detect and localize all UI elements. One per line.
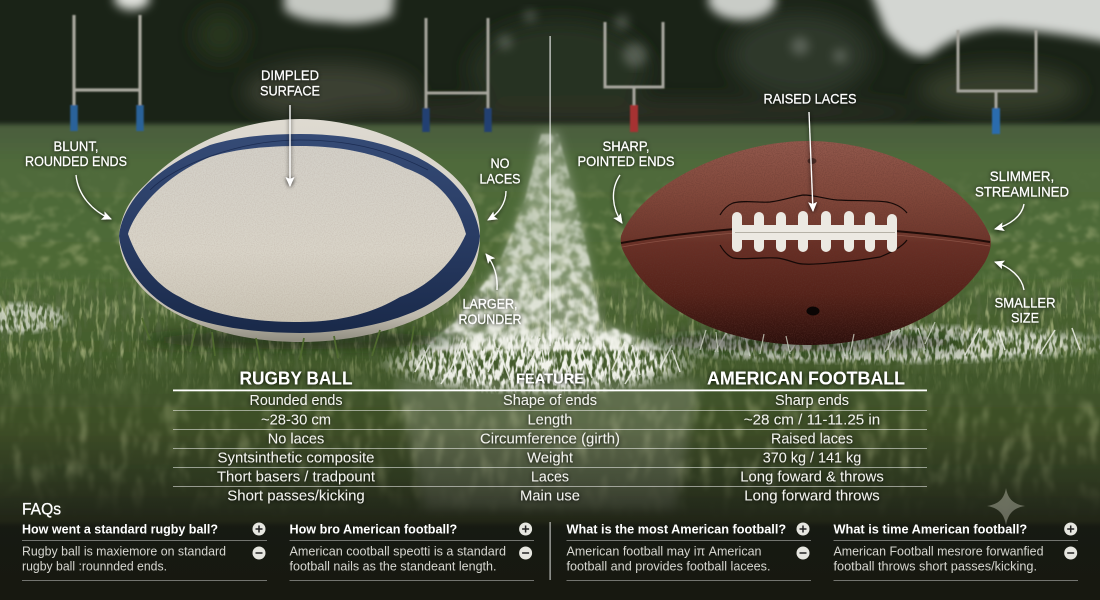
FAQ item 3 xyxy=(566,522,811,581)
feature column xyxy=(480,393,620,504)
centre divider xyxy=(550,36,551,346)
annotation: slimmer streamlined: SLIMMER, xyxy=(990,168,1054,184)
icon: plus xyxy=(796,522,810,536)
FAQ item 2: football nails as the standeant length. xyxy=(290,558,496,574)
ball body xyxy=(119,119,480,342)
icon: minus xyxy=(519,546,532,560)
football column: Long foward & throws xyxy=(740,470,884,486)
rugby column: Syntsinthetic composite xyxy=(218,450,374,466)
rugby column: Short passes/kicking xyxy=(227,488,365,504)
annotation: no laces: NO xyxy=(490,155,510,171)
annotation: smaller size xyxy=(994,262,1056,326)
football column: Sharp ends xyxy=(775,393,849,409)
American football goal post, left xyxy=(605,22,663,132)
air valve top xyxy=(808,158,816,164)
feature column: Main use xyxy=(520,488,580,504)
rugby column: No laces xyxy=(268,432,324,448)
rugby column: Thort basers / tradpount xyxy=(217,470,375,486)
annotation: raised laces: RAISED LACES xyxy=(764,90,856,106)
annotation: raised laces xyxy=(764,90,856,211)
American football xyxy=(615,135,995,354)
table header xyxy=(240,368,905,388)
rugby column: Rounded ends xyxy=(250,393,342,409)
icon: minus xyxy=(252,546,266,560)
American football goal post, right xyxy=(958,30,1036,134)
FAQ item 2: How bro American football? xyxy=(290,522,457,536)
icon: plus xyxy=(519,522,532,536)
feature column: Shape of ends xyxy=(503,393,597,409)
football column: Long forward throws xyxy=(744,488,880,504)
FAQ divider xyxy=(550,522,551,580)
annotation: larger rounder: LARGER, xyxy=(462,296,518,312)
FAQ item 1 xyxy=(22,522,267,581)
annotation: larger rounder: ROUNDER xyxy=(458,311,522,327)
table header: FEATURE xyxy=(516,370,584,388)
football column: ~28 cm / 11-11.25 in xyxy=(744,412,880,428)
icon: sparkle xyxy=(987,488,1025,525)
annotation: blunt rounded ends xyxy=(25,138,127,219)
FAQ item 2 xyxy=(290,522,534,581)
grass at the base of the football xyxy=(700,322,935,354)
table header: AMERICAN FOOTBALL xyxy=(707,368,905,388)
rugby ball xyxy=(119,119,480,360)
feature column: Circumference (girth) xyxy=(480,432,620,448)
rugby column xyxy=(217,393,375,504)
FAQs heading: FAQs xyxy=(22,500,61,518)
icon: plus xyxy=(1064,522,1077,536)
stitched lace panel outline xyxy=(720,195,907,264)
annotation: smaller size: SIZE xyxy=(1011,310,1039,326)
FAQ item 4: What is time American football? xyxy=(834,522,1027,536)
FAQ item 4: American Football mesrore forwanfied xyxy=(834,544,1044,558)
FAQ item 3: American football may iπ American xyxy=(566,544,762,558)
annotation: sharp pointed ends: SHARP, xyxy=(602,138,650,154)
FAQ item 4: football throws short passes/kicking. xyxy=(834,558,1037,574)
FAQ item 3: What is the most American football? xyxy=(566,522,786,536)
annotation: sharp pointed ends: POINTED ENDS xyxy=(578,153,674,169)
annotation: dimpled surface xyxy=(260,67,320,186)
annotation: dimpled surface: DIMPLED xyxy=(261,67,319,83)
icon: plus xyxy=(252,522,266,536)
feature column: Length xyxy=(528,412,572,428)
white laces xyxy=(732,211,897,252)
annotation: blunt rounded ends: BLUNT, xyxy=(54,138,98,154)
grass at the base of the rugby ball xyxy=(142,318,414,360)
icon: minus xyxy=(1064,546,1077,560)
FAQ item 2: American cootball speotti is a standard xyxy=(290,544,506,558)
painted line xyxy=(395,132,700,510)
FAQ item 1: How went a standard rugby ball? xyxy=(22,522,218,536)
ball body xyxy=(621,141,991,345)
annotation: dimpled surface: SURFACE xyxy=(260,82,320,98)
annotation: smaller size: SMALLER xyxy=(994,294,1056,310)
comparison table xyxy=(173,368,927,504)
rugby column: ~28-30 cm xyxy=(261,412,331,428)
annotation: no laces: LACES xyxy=(480,170,520,186)
icon: minus xyxy=(796,546,810,560)
rugby goal post, right xyxy=(426,18,488,132)
annotation: slimmer streamlined: STREAMLINED xyxy=(975,184,1069,200)
dimpled panel xyxy=(128,146,466,322)
annotation: no laces xyxy=(480,155,520,220)
football column: 370 kg / 141 kg xyxy=(763,450,861,466)
hole bottom xyxy=(806,306,820,316)
annotation: slimmer streamlined xyxy=(975,168,1069,229)
annotation: blunt rounded ends: ROUNDED ENDS xyxy=(25,153,127,169)
annotation: larger rounder xyxy=(458,254,522,327)
FAQ item 1: Rugby ball is maxiemore on standard xyxy=(22,544,226,558)
rugby goal post, left xyxy=(74,15,140,131)
football column: Raised laces xyxy=(771,432,853,448)
seam xyxy=(621,229,990,243)
football column xyxy=(740,393,884,504)
feature column: Laces xyxy=(531,470,569,486)
feature column: Weight xyxy=(527,450,573,466)
FAQ item 1: rugby ball :rounnded ends. xyxy=(22,558,167,574)
FAQ item 3: football and provides football lacees. xyxy=(566,558,770,574)
annotation: sharp pointed ends xyxy=(578,138,674,223)
FAQ item 4 xyxy=(834,522,1078,581)
navy band xyxy=(119,134,480,333)
table header: RUGBY BALL xyxy=(240,368,352,388)
